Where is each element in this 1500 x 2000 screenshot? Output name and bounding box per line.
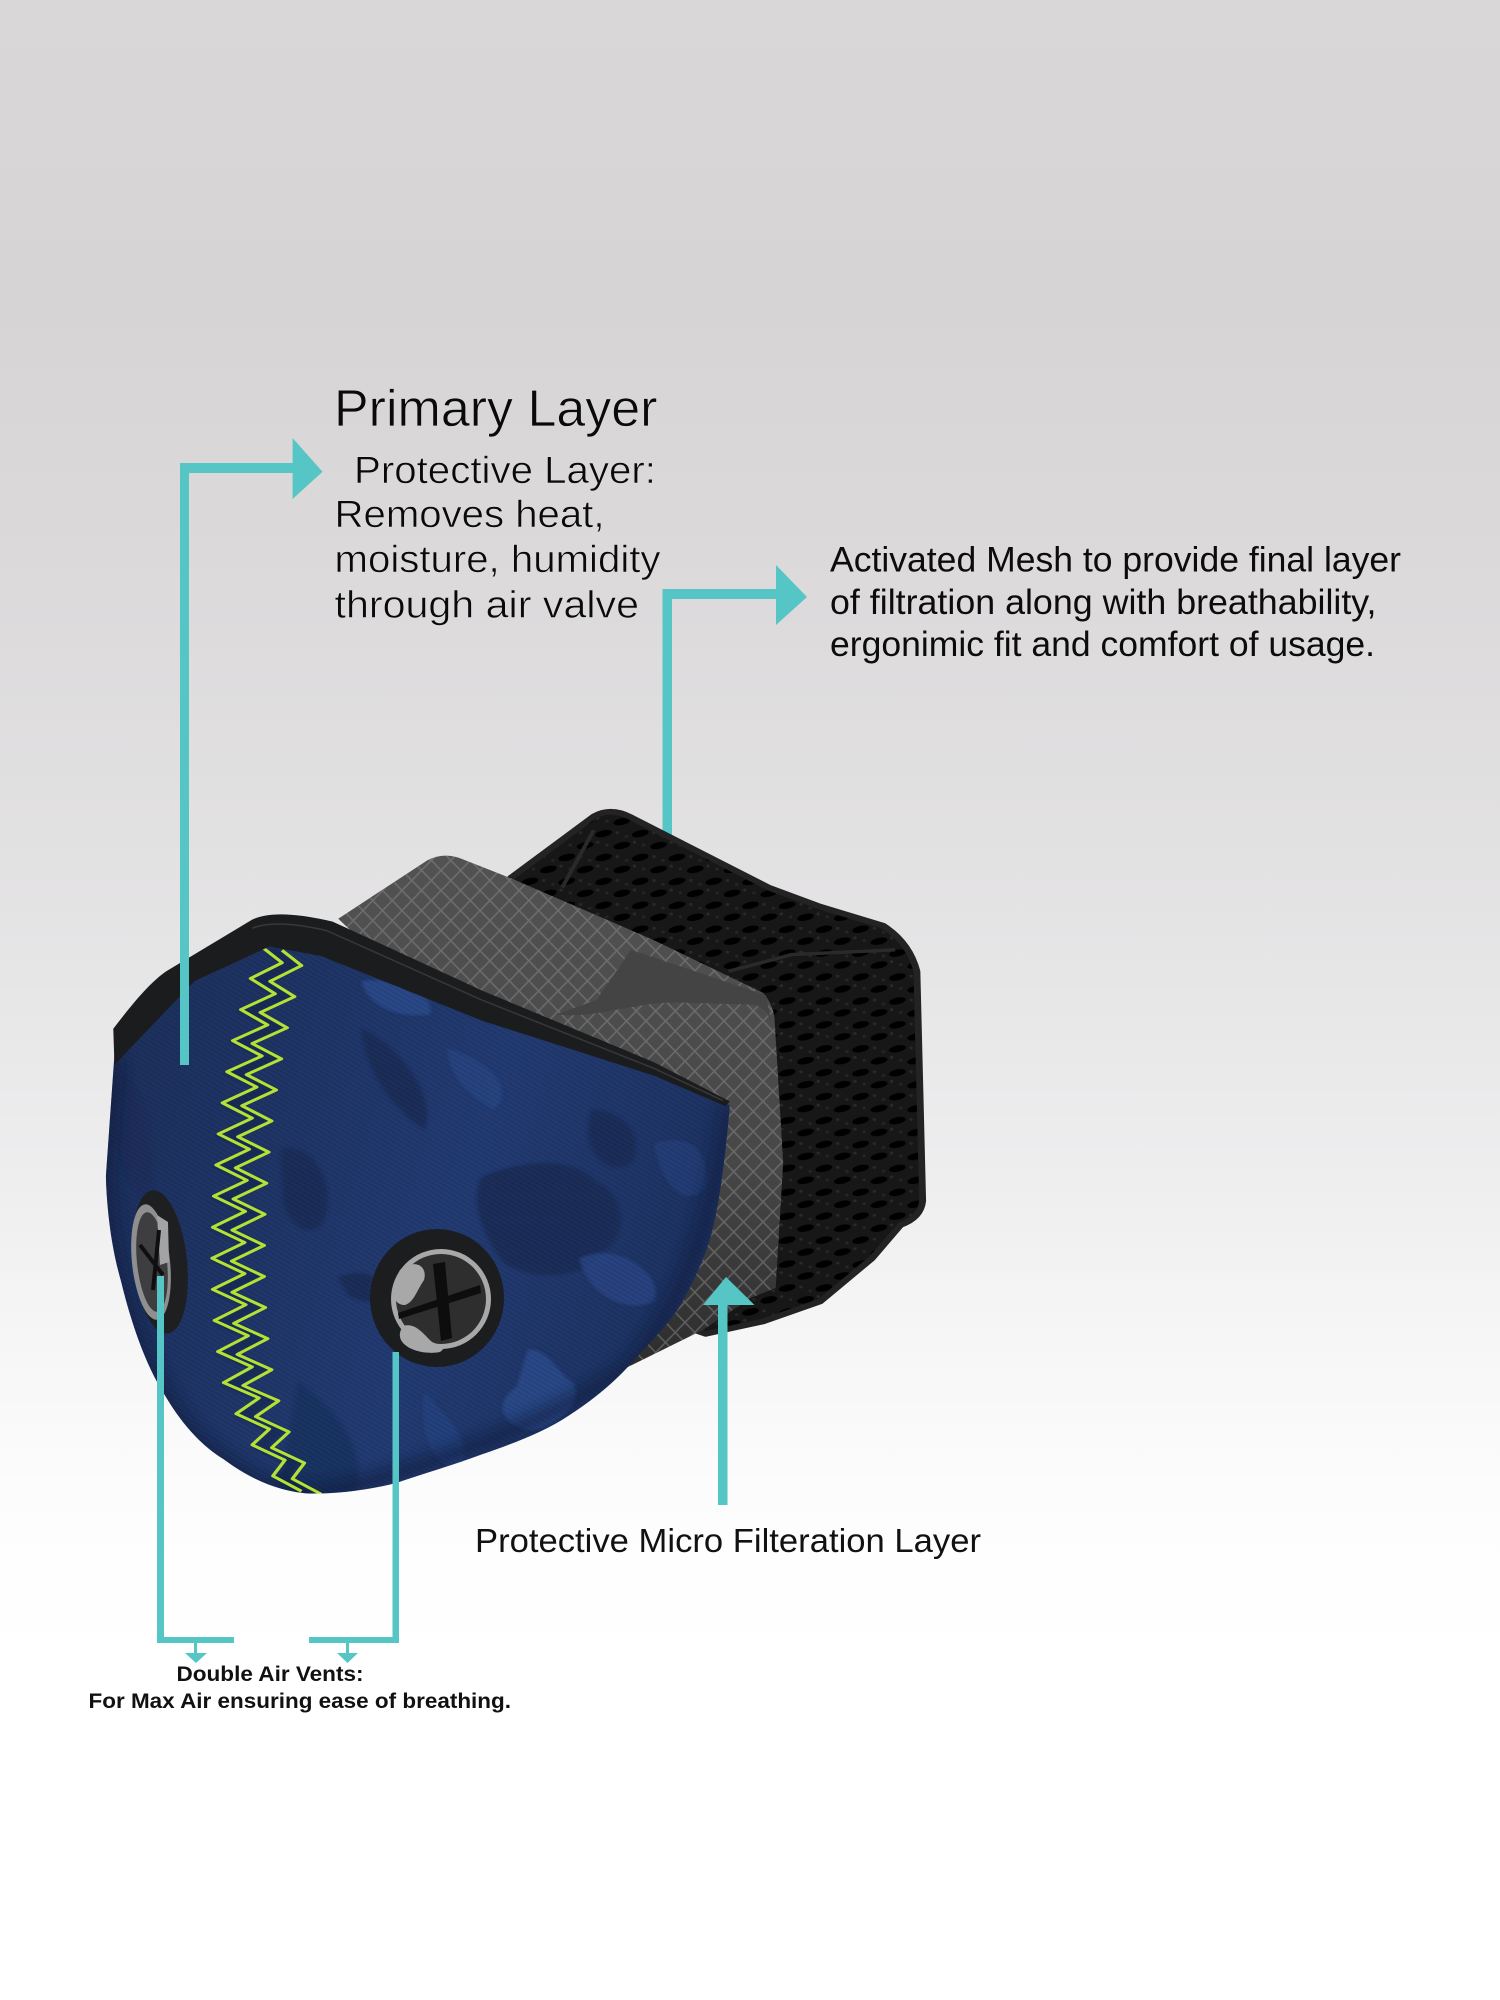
text block: double air vents: For Max Air ensuring ease of breathing.: [88, 1690, 511, 1713]
icon: right air vent: [370, 1229, 504, 1367]
icon: left air vent: [126, 1188, 194, 1336]
stitch shadow: [220, 949, 310, 1493]
text block: activated mesh description: of filtration along with breathability,: [830, 583, 1376, 622]
front layer: navy camouflage fabric: [97, 923, 740, 1502]
text block: activated mesh description: ergonimic fit and comfort of usage.: [830, 625, 1375, 664]
black binding band: [113, 914, 730, 1106]
arrow: primary layer connector: [180, 438, 322, 1065]
fabric twill: [164, 953, 714, 1484]
text block: protective layer description: through air valve: [334, 585, 639, 627]
mask illustration: [97, 812, 923, 1502]
text block: activated mesh description: Activated Mesh to provide final layer: [830, 541, 1401, 580]
arrow: right air vent bracket: [309, 1352, 399, 1663]
label: protective micro filteration layer: Protective Micro Filteration Layer: [475, 1522, 981, 1559]
arrow: activated mesh connector: [662, 565, 807, 839]
zigzag lime stitching: [212, 947, 321, 1494]
camouflage patches: [281, 1030, 636, 1493]
arrow: left air vent bracket: [157, 1276, 234, 1663]
fabric fold shading: [106, 1055, 730, 1494]
text block: double air vents: Double Air Vents:: [176, 1663, 364, 1686]
text block: protective layer description: moisture, humidity: [334, 539, 660, 581]
back layer: black activated mesh: [510, 812, 923, 1334]
text block: activated mesh description: [830, 541, 1401, 664]
text block: double air vents: [88, 1663, 511, 1713]
arrow: micro filtration layer: [703, 1277, 754, 1505]
heading: Primary Layer: Primary Layer: [334, 380, 658, 438]
text block: protective layer description: Protective Layer:: [354, 450, 656, 492]
middle layer: gray micro filtration mesh: [338, 856, 783, 1368]
text block: protective layer description: [334, 450, 660, 627]
text block: protective layer description: Removes heat,: [334, 494, 604, 536]
